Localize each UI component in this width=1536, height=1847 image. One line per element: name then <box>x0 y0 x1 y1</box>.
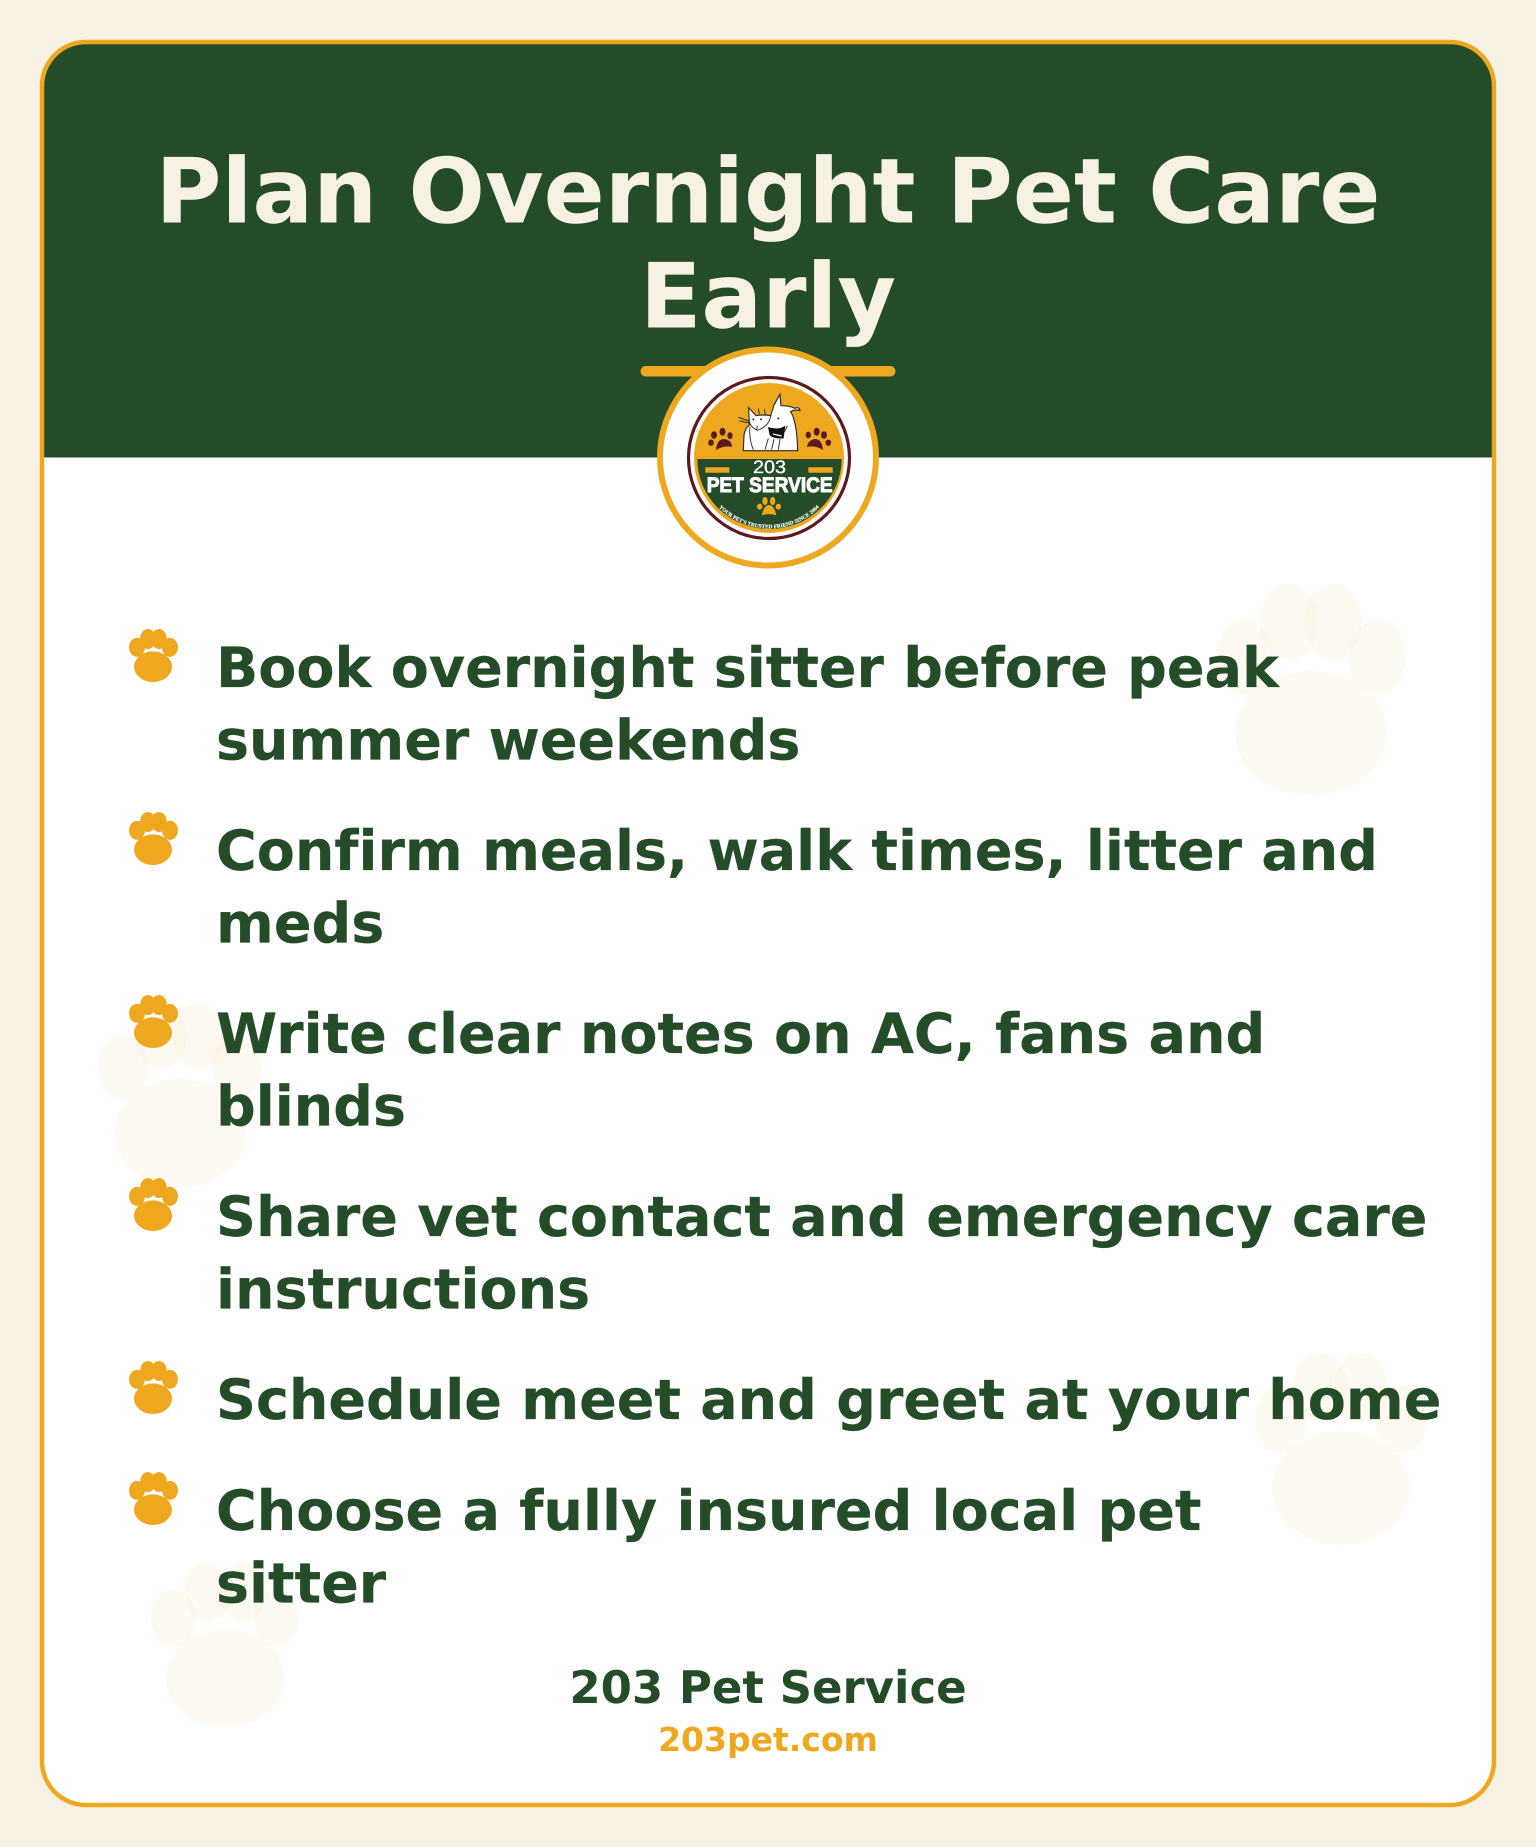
list item 6 <box>129 1472 1201 1617</box>
list item 3: blinds <box>216 1075 406 1140</box>
logo number 203: 203 <box>753 457 786 477</box>
watermark paw: top right <box>1216 584 1406 795</box>
list item 1 <box>129 629 1280 774</box>
title <box>156 140 1380 350</box>
list item 5: Schedule meet and greet at your home <box>216 1368 1441 1433</box>
icon: paw bullet 5 <box>129 1361 178 1414</box>
footer brand name: 203 Pet Service <box>569 1661 967 1714</box>
footer website: 203pet.com <box>658 1720 878 1759</box>
list item 1: summer weekends <box>216 709 800 774</box>
watermark paw: bottom left <box>151 1562 299 1726</box>
watermark paw: lower right <box>1255 1353 1427 1545</box>
icon: paw bullet 1 <box>129 629 178 682</box>
title: Early <box>640 244 896 350</box>
icon: paw bullet 2 <box>129 812 178 865</box>
logo name: PET SERVICE <box>707 474 833 497</box>
title underline <box>640 366 896 376</box>
list item 3 <box>129 995 1265 1140</box>
icon: paw bullet 6 <box>129 1472 178 1525</box>
list item 3: Write clear notes on AC, fans and <box>216 1002 1265 1067</box>
list item 2 <box>129 812 1378 957</box>
logo badge <box>657 346 879 568</box>
list item 2: meds <box>216 892 384 957</box>
list item 4: instructions <box>216 1258 590 1323</box>
list item 1: Book overnight sitter before peak <box>216 636 1280 701</box>
title: Plan Overnight Pet Care <box>156 140 1380 244</box>
logo cat and dog <box>738 394 800 451</box>
list item 6: Choose a fully insured local pet <box>216 1479 1201 1544</box>
logo left brown paw <box>708 428 733 450</box>
list item 2: Confirm meals, walk times, litter and <box>216 819 1378 884</box>
watermark paw: middle left <box>98 1004 262 1187</box>
logo gold bars <box>705 467 833 473</box>
logo curved tagline: YOUR PET'S TRUSTED FRIEND SINCE 2004 <box>719 504 819 528</box>
logo small gold paw <box>757 497 781 515</box>
logo right brown paw <box>806 428 831 450</box>
list item 4: Share vet contact and emergency care <box>216 1185 1427 1250</box>
header band <box>42 42 1494 458</box>
list item 6: sitter <box>216 1552 387 1617</box>
icon: paw bullet 4 <box>129 1178 178 1231</box>
list item 4 <box>129 1178 1427 1323</box>
logo green lower panel <box>697 459 842 529</box>
icon: paw bullet 3 <box>129 995 178 1048</box>
